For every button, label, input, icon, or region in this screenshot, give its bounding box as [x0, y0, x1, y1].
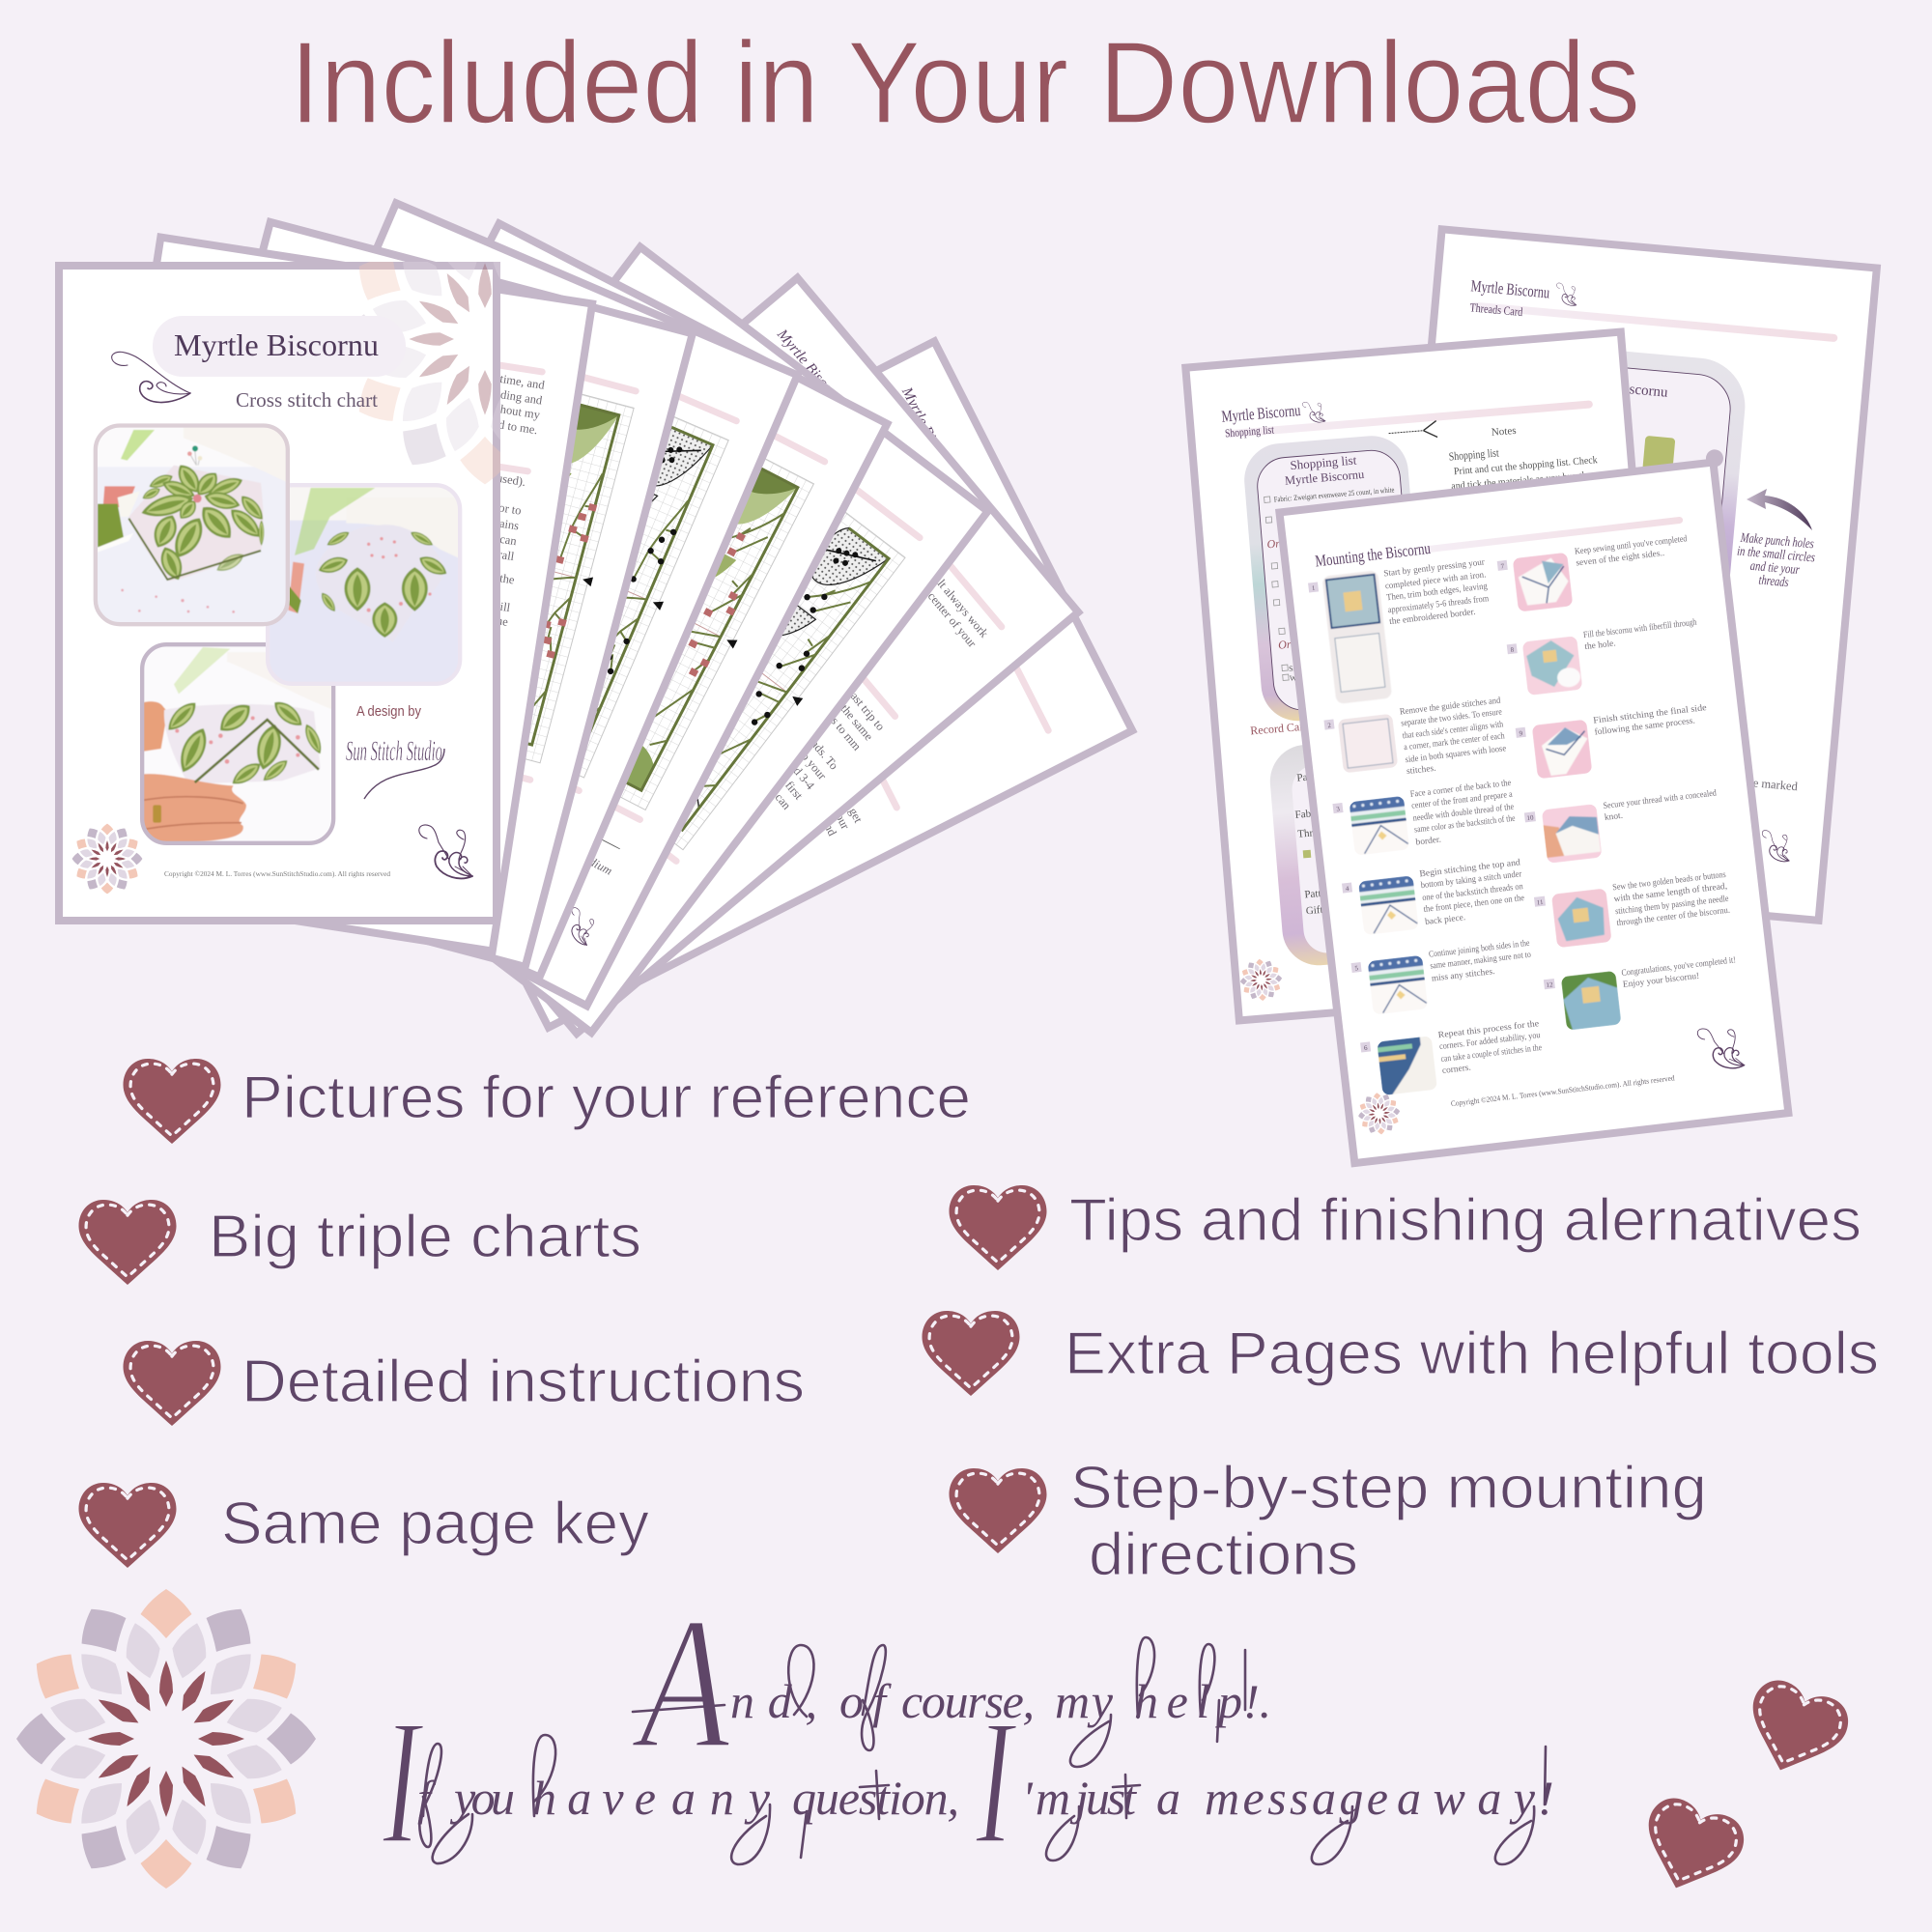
- closing line 1: course,: [901, 1674, 1035, 1728]
- cover subtitle: Cross stitch chart: [236, 388, 378, 412]
- shopping list card: Fabric: Zweigart evenweave 25 count, in white: [1273, 485, 1395, 504]
- step 2: stitches.: [1406, 764, 1436, 777]
- mounting small flower: [1356, 1091, 1403, 1137]
- step 9: Finish stitching the final side: [1593, 702, 1707, 726]
- step 2: that each side's center aligns with: [1402, 720, 1504, 741]
- icon: heart: [949, 1185, 1047, 1270]
- step 9: 9: [1519, 729, 1523, 737]
- step 3: same color as the backstitch of the: [1413, 813, 1516, 836]
- page: colour chart 2: [199, 223, 887, 1006]
- step 11: [1533, 870, 1732, 950]
- step 5: Continue joining both sides in the: [1429, 939, 1530, 960]
- step 6: corners.: [1441, 1064, 1471, 1076]
- step 2: separate the two sides. To ensure: [1401, 707, 1502, 728]
- closing line 2: I: [975, 1683, 1017, 1882]
- cover copyright: Copyright ©2024 M. L. Torres (www.SunStitchStudio.com). All rights reserved: [164, 869, 390, 878]
- page: text page, far right: for the best way to get: [805, 723, 866, 825]
- shopping swirl: [1302, 401, 1325, 424]
- feature: extra pages: Extra Pages with helpful tools: [1065, 1321, 1879, 1387]
- icon: heart: [79, 1200, 176, 1285]
- icon: heart: [124, 1341, 220, 1426]
- threads card subheading: Threads Card: [1469, 300, 1524, 319]
- punch note: Punch holes in the marked: [1669, 769, 1799, 793]
- closing line 2: you: [449, 1771, 515, 1825]
- photo: top view of biscornu back: [268, 485, 460, 685]
- step 4: bottom by taking a stitch under: [1420, 869, 1523, 891]
- closing line 1: !.: [1243, 1674, 1271, 1728]
- callout: punch holes note: and tie your: [1749, 559, 1801, 578]
- page: text page, tips: and beads. To: [788, 713, 841, 773]
- page: introduction text: the file contains: [441, 507, 520, 533]
- page: introduction text: on paper or to: [453, 494, 523, 518]
- step 3: needle with double thread of the: [1412, 802, 1515, 824]
- icon: heart: [922, 1311, 1020, 1396]
- icon: heart: [124, 1059, 220, 1144]
- page: colour chart 2: medium: [575, 848, 614, 878]
- closing line 2: just: [1069, 1771, 1137, 1825]
- closing line 2: [382, 1683, 1554, 1882]
- callout: punch holes note: in the small circles: [1736, 545, 1816, 566]
- step 8: Fill the biscornu with fiberfill through: [1583, 617, 1697, 640]
- record card: Pattern: [1304, 887, 1335, 900]
- scissors cut line: [1388, 421, 1437, 441]
- step 4: 4: [1345, 885, 1350, 893]
- page: text page, tips: you can: [759, 775, 794, 812]
- step 7: seven of the eight sides..: [1576, 548, 1665, 569]
- cover swirl: [112, 352, 190, 403]
- notes text: Shopping list: [1448, 445, 1500, 464]
- step 1: approximately 5-6 threads from: [1387, 593, 1490, 615]
- step 5: [1350, 939, 1536, 1017]
- threads swirl: [1760, 830, 1792, 862]
- step 3: 3: [1336, 805, 1341, 813]
- page: symbol chart 2: [243, 247, 988, 1033]
- step 10: [1524, 788, 1722, 866]
- threads card body: [1422, 337, 1749, 872]
- step 5: same manner, making sure not to: [1430, 951, 1532, 972]
- large flower logo: [16, 1589, 316, 1889]
- record card: Gift: [1305, 904, 1323, 917]
- step 2: a corner, mark the center of each: [1404, 730, 1505, 753]
- step 6: corners. For added stability, you: [1439, 1031, 1541, 1052]
- record card: Fabric: [1294, 808, 1322, 821]
- step 6: can take a couple of stitches in the: [1440, 1042, 1543, 1065]
- step 6: Repeat this process for the: [1437, 1018, 1540, 1040]
- page: introduction text: the: [493, 613, 509, 629]
- page: text page, tips: transfer to your: [771, 717, 830, 782]
- step 3: Face a corner of the back to the: [1409, 778, 1512, 800]
- step 1: 1: [1311, 584, 1316, 592]
- page: colour chart 1: [103, 222, 693, 967]
- step 10: knot.: [1604, 811, 1623, 823]
- feature list, left column: [79, 1059, 971, 1568]
- threads card heading: Myrtle Biscornu: [1470, 276, 1550, 302]
- step 6: [1360, 1018, 1546, 1097]
- record card label: Record Card: [1250, 719, 1310, 737]
- step 2: Remove the guide stitches and: [1399, 696, 1501, 718]
- step 5: miss any stitches.: [1431, 967, 1495, 984]
- threads title swirl: [1555, 283, 1578, 306]
- cover title: Myrtle Biscornu: [174, 327, 379, 362]
- page: introduction text: (threads used).: [454, 465, 526, 489]
- closing line 1: A: [631, 1578, 730, 1788]
- closing line 1: my: [1055, 1674, 1114, 1728]
- feature: mounting directions: [1070, 1455, 1707, 1588]
- step 3: center of the front and prepare a: [1411, 789, 1514, 811]
- step 10: Secure your thread with a concealed: [1603, 788, 1718, 811]
- feature: pictures: Pictures for your reference: [242, 1065, 971, 1131]
- page: introduction text: not sharing it without my: [418, 389, 542, 422]
- notes text: [1448, 438, 1600, 493]
- cover title pill: [153, 316, 406, 377]
- step 11: stitching them by passing the needle: [1615, 895, 1729, 917]
- step 11: 11: [1536, 898, 1544, 907]
- page: threads card: [1383, 229, 1877, 921]
- page: introduction text: thanks for understanding and: [402, 373, 544, 408]
- feature: mounting directions: Step-by-step mounting: [1070, 1455, 1707, 1521]
- notes text: and tick the materials as you buy them: [1451, 469, 1599, 493]
- step 9: following the same process.: [1594, 716, 1695, 737]
- closing line 1: [631, 1578, 1271, 1788]
- cover watermark flower: [359, 262, 500, 485]
- step 7: 7: [1500, 562, 1505, 571]
- page: text page, tips: the market and the same: [790, 644, 876, 744]
- page: introduction text: This chart is my heart, time, and: [389, 355, 546, 392]
- page: text page, tips: [296, 278, 1078, 1034]
- step 12: Enjoy your biscornu!: [1622, 972, 1700, 990]
- photos, drawn in a shared 3x coordinate space: [95, 425, 460, 843]
- A design by: A design by: [356, 704, 422, 720]
- closing line 2: 'm: [1022, 1771, 1070, 1825]
- page: introduction text: so you can: [465, 526, 518, 548]
- shopping small flower: [1238, 957, 1284, 1003]
- step 4: Begin stitching the top and: [1419, 858, 1521, 879]
- page: text page, tips: then add 3-4: [768, 737, 817, 793]
- page: introduction text: on the: [484, 569, 516, 587]
- closing line 2: !: [1538, 1771, 1554, 1825]
- heading rule: [1469, 301, 1838, 342]
- record card: Threads: [1297, 826, 1332, 840]
- closing line 2: away: [1397, 1771, 1536, 1825]
- feature: mounting directions: directions: [1089, 1521, 1358, 1588]
- shopping list card: Or: [1266, 536, 1281, 551]
- notes text: Print and cut the shopping list. Check: [1454, 455, 1599, 477]
- icon: tilted heart lower: [1630, 1791, 1751, 1905]
- closing line 1: help: [1134, 1674, 1242, 1728]
- step 12: [1544, 955, 1742, 1033]
- step 11: Sew the two golden beads or buttons: [1612, 870, 1727, 893]
- step 11: through the center of the biscornu.: [1616, 905, 1730, 928]
- page: symbol chart 1: [138, 203, 798, 977]
- photo: top view of biscornu front: [95, 425, 288, 625]
- step 4: the front piece, then one on the: [1423, 893, 1525, 915]
- page: text page, tips: seeds to mm: [814, 698, 864, 753]
- shopping list card: Shears: [1289, 663, 1310, 673]
- page fan: chart booklet pages: [61, 203, 1132, 1034]
- icon: tilted heart upper: [1734, 1673, 1856, 1787]
- step 1: Start by gently pressing your: [1383, 557, 1486, 579]
- record card: Pattern: [1296, 770, 1328, 784]
- page: introduction text: you will: [469, 595, 512, 614]
- photo: side view held in hand: [140, 644, 333, 843]
- step 7: [1496, 534, 1693, 614]
- step 2: 2: [1327, 722, 1332, 729]
- step 1: completed piece with an iron.: [1384, 570, 1487, 591]
- heading rule: [1226, 400, 1593, 438]
- step 10: 10: [1526, 813, 1534, 822]
- closing line 1: nd,: [730, 1674, 817, 1728]
- page: text page, far right: the most from your: [798, 743, 853, 832]
- page: text page, tips: for the best result always work: [885, 518, 991, 640]
- script flourishes: [419, 1637, 1546, 1864]
- closing message: [382, 1578, 1554, 1882]
- notes label: Notes: [1491, 425, 1517, 439]
- mounting swirl: [1697, 1024, 1745, 1072]
- feature: charts: Big triple charts: [209, 1204, 641, 1270]
- step 8: the hole.: [1584, 639, 1616, 652]
- page: text page, far right: [351, 341, 1132, 1028]
- step 8: [1506, 617, 1703, 697]
- closing line 2: a: [1156, 1771, 1180, 1825]
- threads card body: Myrtle Biscornu: [1572, 377, 1669, 401]
- shopping subheading: Shopping list: [1224, 422, 1275, 440]
- page: introduction text: it means the world to me.: [415, 405, 539, 437]
- page: text page, tips: starting in the center of your: [881, 536, 980, 650]
- page: shopping list: [1185, 332, 1674, 1020]
- step 7: Keep sewing until you've completed: [1575, 534, 1688, 557]
- feature: instructions: Detailed instructions: [242, 1349, 805, 1415]
- page: text page, tips: bought on my last trip to: [801, 634, 888, 733]
- feature list, right column: [922, 1185, 1879, 1588]
- step 6: 6: [1364, 1044, 1368, 1052]
- shopping list card: Or: [1278, 638, 1292, 652]
- closing line 2: I: [382, 1683, 424, 1882]
- step 4: one of the backstitch threads on: [1422, 881, 1523, 903]
- step 3: border.: [1415, 836, 1441, 848]
- closing line 2: message: [1205, 1771, 1388, 1825]
- mounting copyright: Copyright ©2024 M. L. Torres (www.SunStitchStudio.com). All rights reserved: [1450, 1073, 1675, 1108]
- icon: heart: [949, 1468, 1047, 1553]
- page: mounting the biscornu: [1278, 448, 1799, 1163]
- closing line 2: question,: [792, 1771, 959, 1825]
- closing line 1: of: [839, 1674, 892, 1728]
- closing line 2: f: [417, 1771, 437, 1825]
- step 3: [1332, 778, 1518, 858]
- shopping list card: [1241, 433, 1428, 724]
- step 9: [1515, 702, 1713, 781]
- step 4: [1341, 858, 1527, 937]
- shopping list card: Shopping list: [1290, 452, 1357, 472]
- cover page: Myrtle Biscornu: Sun Stitch Studio: [346, 735, 442, 767]
- step 8: 8: [1510, 646, 1515, 654]
- step 12: Congratulations, you've completed it!: [1621, 955, 1736, 979]
- cover small flower: [72, 824, 142, 894]
- closing line 2: have: [532, 1771, 656, 1825]
- Sun Stitch Studio signature: [346, 735, 444, 799]
- step 5: 5: [1354, 964, 1359, 973]
- step 1: the embroidered border.: [1389, 608, 1476, 627]
- callout: punch holes note: [1734, 531, 1817, 592]
- shopping heading: Myrtle Biscornu: [1221, 401, 1301, 426]
- shopping list card: White thread: [1290, 671, 1330, 683]
- step 4: back piece.: [1425, 913, 1466, 927]
- step 12: 12: [1546, 980, 1553, 989]
- feature: tips: Tips and finishing alernatives: [1069, 1187, 1861, 1254]
- callout: punch holes note: threads: [1758, 574, 1790, 590]
- page: text page, far right: thread and: [805, 786, 839, 838]
- page: text page, tips: Myrtle Biscornu: [773, 326, 849, 412]
- feature: key: Same page key: [221, 1491, 649, 1557]
- page: text page, tips: the first: [771, 765, 806, 803]
- callout: punch holes note: Make punch holes: [1739, 531, 1815, 552]
- page: text page, far right: Myrtle Biscornu: [898, 384, 957, 479]
- title: Included in Your Downloads: [290, 16, 1640, 148]
- heading rule: [1425, 517, 1683, 553]
- cover corner swirl: [419, 825, 472, 878]
- step 11: with the same length of thread,: [1613, 881, 1728, 904]
- mounting heading: Mounting the Biscornu: [1314, 539, 1432, 571]
- step 2: side in both squares with loose: [1405, 744, 1507, 765]
- shopping list card: Myrtle Biscornu: [1285, 468, 1365, 488]
- icon: heart: [79, 1483, 176, 1568]
- record card: [1267, 734, 1448, 968]
- step 1: Then, trim both edges, leaving: [1386, 582, 1489, 603]
- page: introduction text: [61, 238, 592, 952]
- arrow: points to punch holes: [1747, 489, 1812, 530]
- page: introduction text: the overall: [463, 542, 516, 563]
- step 2: [1323, 696, 1506, 774]
- cover page: Myrtle Biscornu: [55, 262, 500, 924]
- closing line 2: any: [671, 1771, 771, 1825]
- step 1: [1307, 557, 1499, 706]
